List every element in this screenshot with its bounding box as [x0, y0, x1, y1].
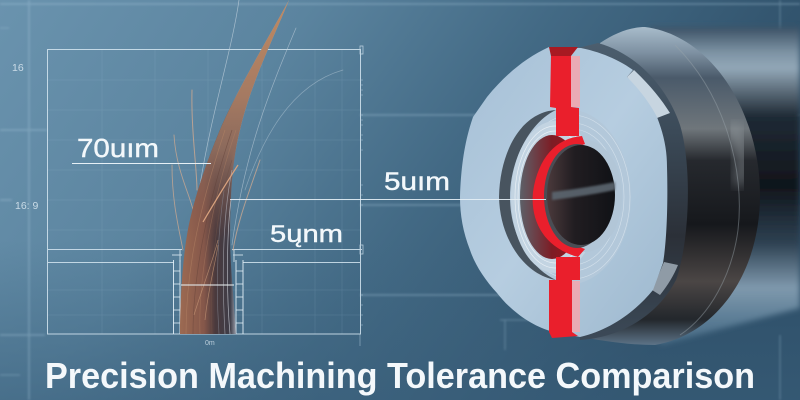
label: cylinder tolerance: 5uım [384, 168, 450, 196]
red tolerance ring [533, 136, 585, 257]
rear flange [580, 27, 760, 345]
red tolerance band bottom [549, 257, 580, 338]
disc front face [460, 47, 667, 337]
axis label: 16: 16 [12, 62, 24, 74]
machining recess [503, 109, 631, 285]
socket scale ladder [172, 250, 243, 334]
inner dark step [520, 135, 584, 259]
disc rim [578, 43, 688, 340]
red tolerance band top [550, 55, 579, 136]
socket cross line [181, 284, 234, 286]
label: lower tolerance: 5ųnm [270, 221, 343, 248]
panel: hair scale grid [47, 46, 363, 346]
leader line: gauge to ring [230, 198, 546, 200]
axis label: 16:9: 16: 9 [15, 200, 39, 212]
dark bore [547, 145, 615, 245]
hair body [180, 0, 289, 334]
label: hair diameter: 70uım [77, 133, 159, 163]
bore shadow ring [544, 144, 610, 248]
axis label: bottom unit: 0m [205, 340, 215, 347]
icon: machined cylinder with red tolerance band [460, 27, 800, 345]
title: Precision Machining Tolerance Comparison [45, 355, 755, 396]
leader line: hair diameter [72, 162, 211, 164]
cylinder shaft [650, 27, 800, 345]
bore lip on the right [548, 140, 622, 252]
rim highlight facets [627, 70, 670, 118]
icon: human hair strand [172, 0, 343, 334]
